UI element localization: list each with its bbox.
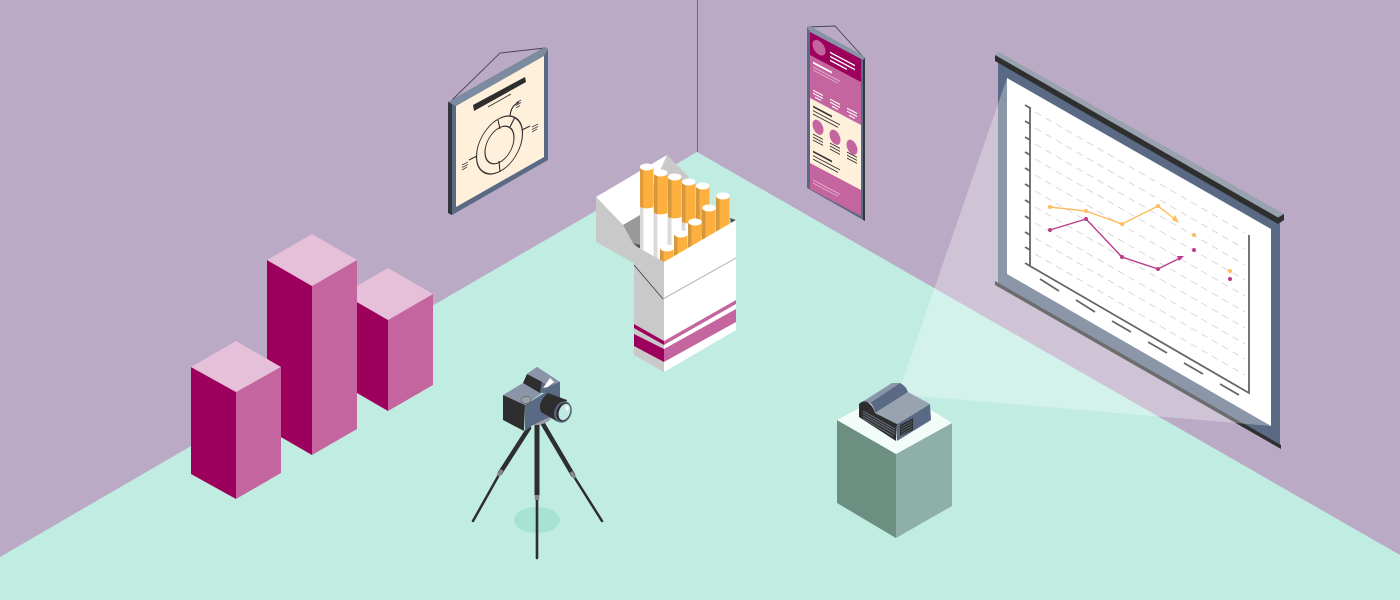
cigarette pack (596, 155, 736, 372)
cigarettes (640, 164, 730, 273)
magenta data line (1048, 217, 1232, 281)
tripod head (531, 413, 553, 427)
bottom roller (995, 281, 1281, 449)
3D bar chart (191, 234, 433, 499)
plinth (837, 388, 952, 538)
camera body (503, 367, 560, 431)
floor (0, 152, 1400, 600)
orange data line (1048, 204, 1232, 273)
x axis labels (1040, 279, 1239, 395)
tripod legs (473, 424, 602, 558)
open lid (596, 155, 689, 263)
camera on tripod (473, 367, 602, 558)
screen frame and rollers (995, 52, 1284, 449)
hanging wire (808, 26, 864, 58)
poster: donut chart (448, 47, 548, 215)
bar: tall (267, 234, 357, 455)
poster: tall infographic (807, 26, 865, 221)
donut ring (469, 102, 530, 183)
front row (702, 204, 716, 248)
plinth with projector (837, 383, 952, 538)
poster content (810, 32, 861, 216)
chart axes (1025, 105, 1249, 393)
callout text lines (462, 100, 538, 170)
camera lens (540, 393, 575, 425)
projection screen with line chart (1007, 78, 1271, 426)
wall corner line (696, 0, 698, 152)
chart grid lines (1035, 112, 1245, 375)
projector (859, 383, 931, 441)
bar: front (191, 341, 281, 499)
bar: back (343, 268, 433, 411)
hanging wire (452, 48, 545, 100)
pack body (634, 218, 736, 372)
projector vents (863, 411, 895, 436)
projector light beam (901, 78, 1271, 426)
back row (640, 164, 654, 262)
tripod shadow (514, 507, 560, 533)
top roller (995, 52, 1284, 218)
